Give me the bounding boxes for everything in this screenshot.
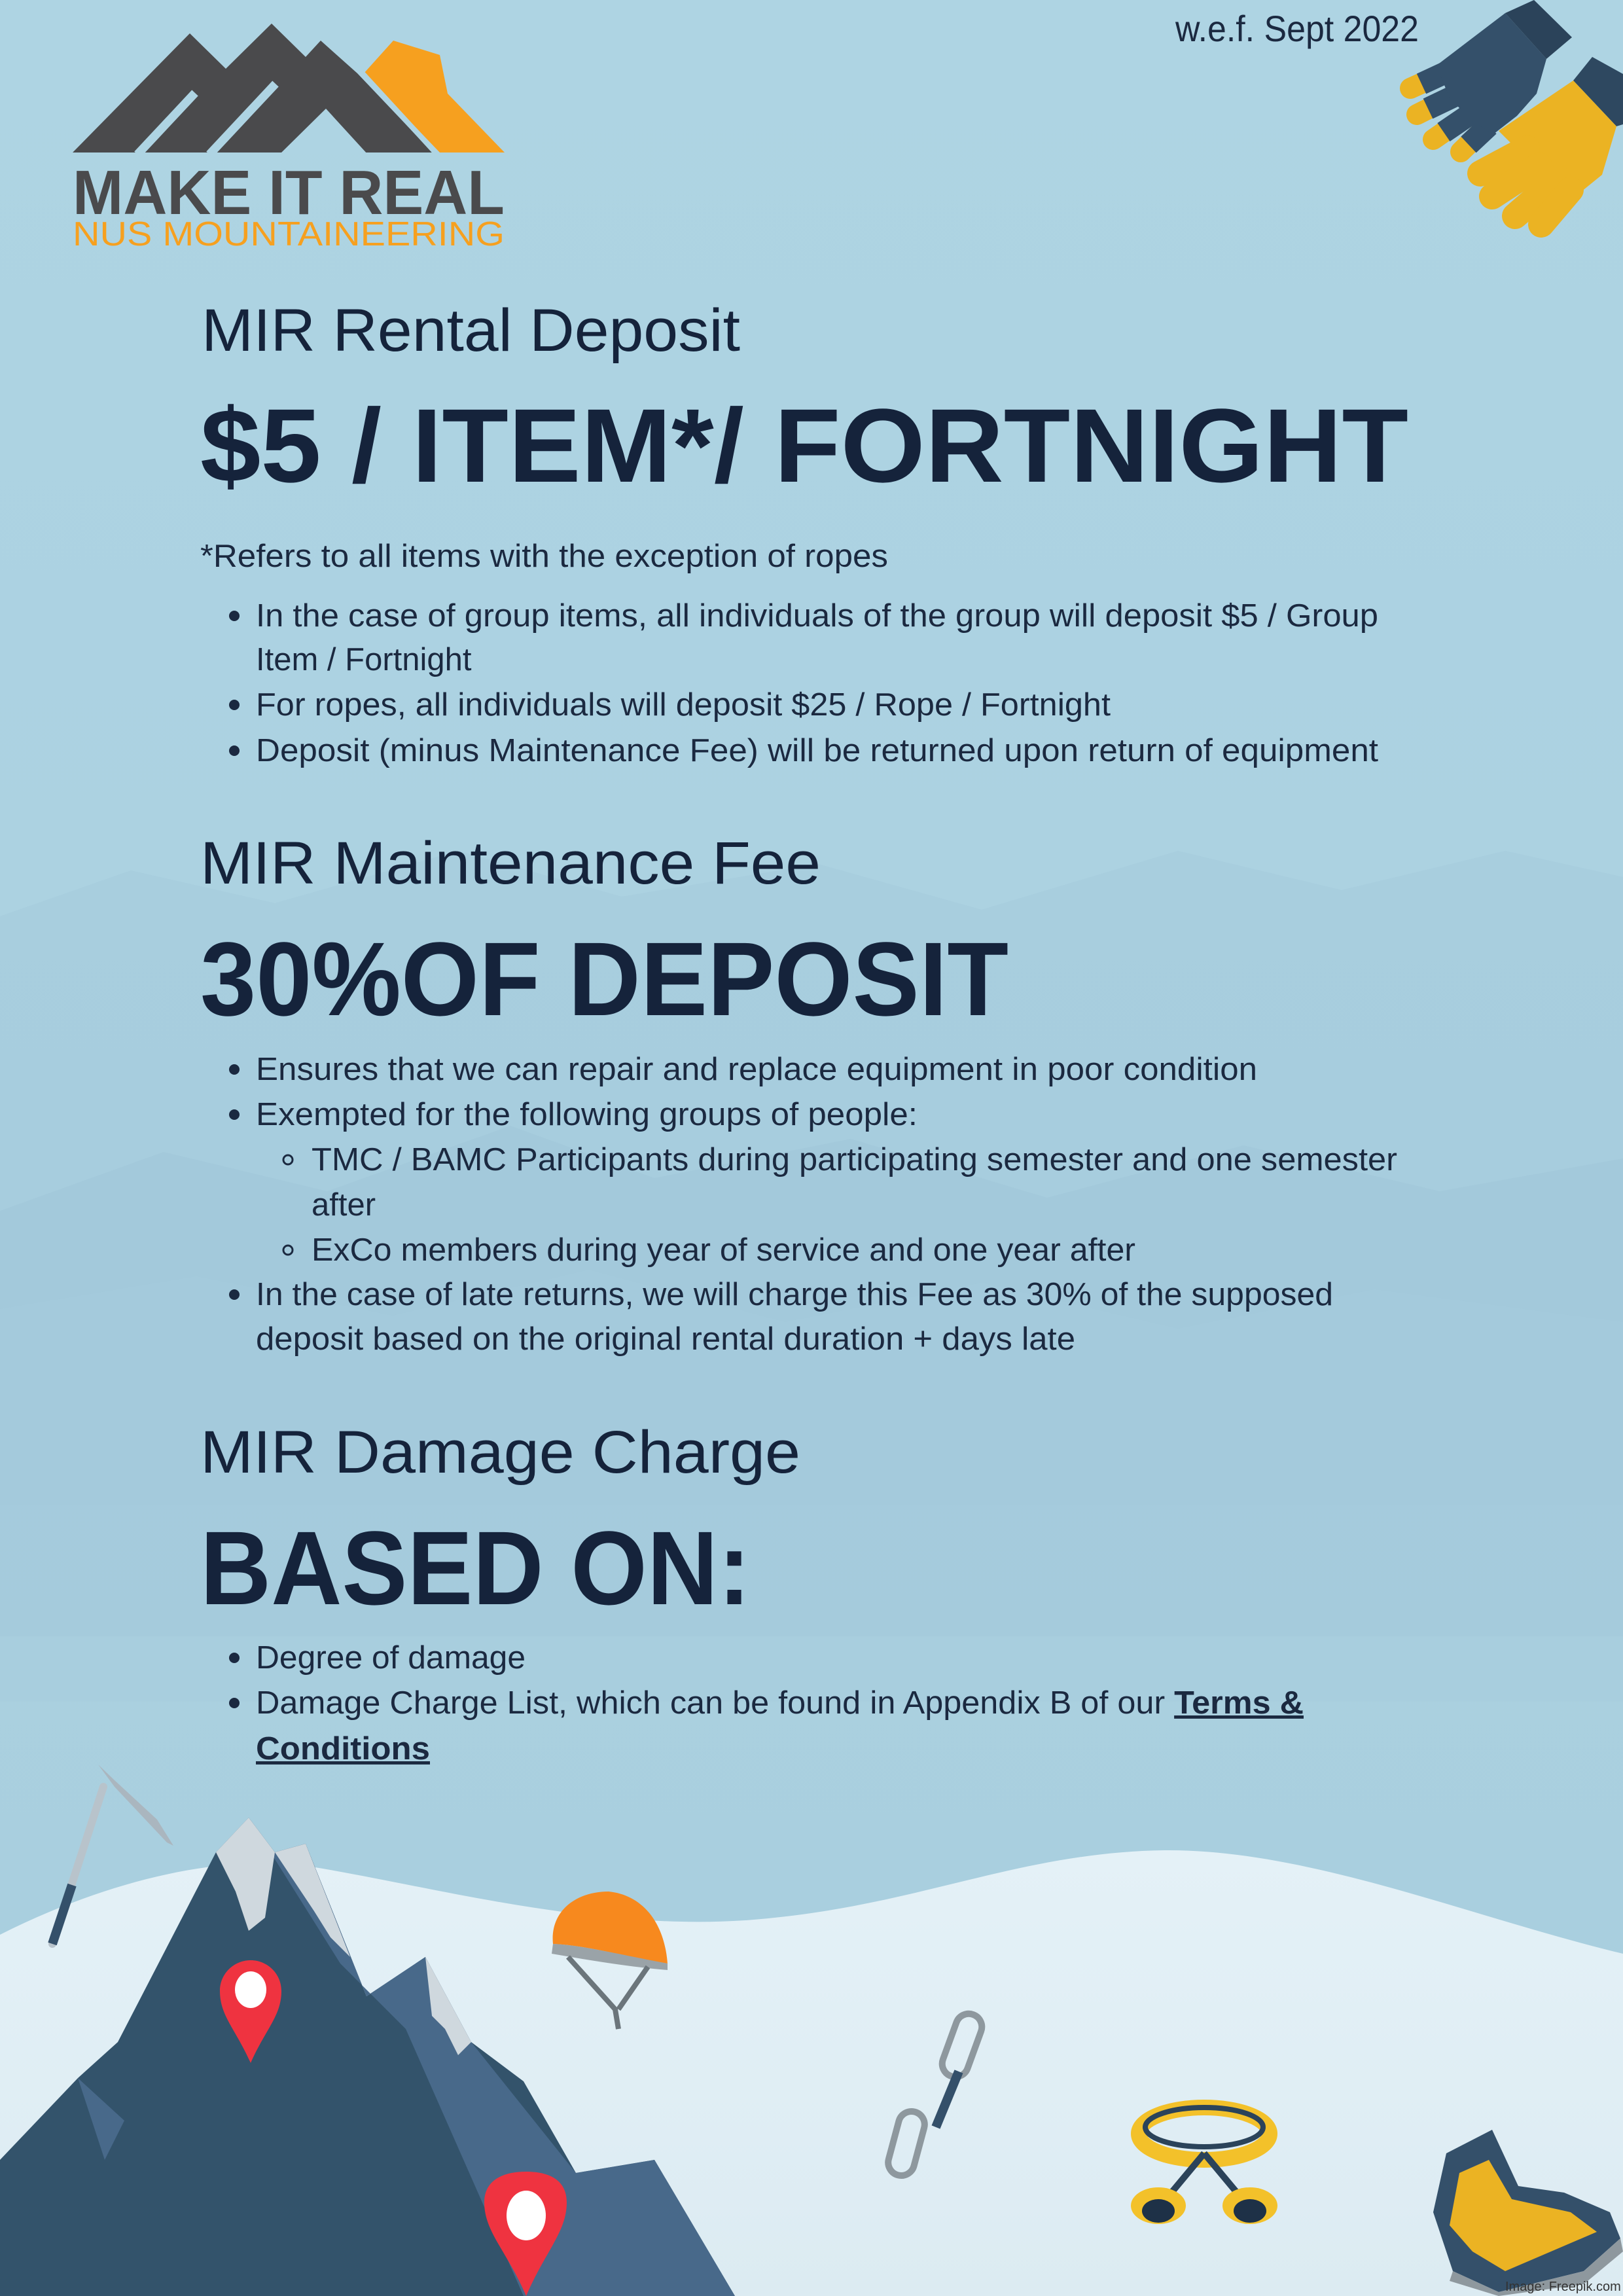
logo text: MAKE IT REAL [73, 158, 505, 228]
bullet list: maintenance: ExCo members during year of service and one year after [312, 1232, 1135, 1268]
icon: pin 1 [220, 1960, 281, 2063]
bullet list: damage: Degree of damage [256, 1640, 526, 1676]
bullet list: maintenance [229, 1052, 1397, 1357]
icon: harness [1131, 2108, 1277, 2224]
big price: $5 / ITEM*/ FORTNIGHT [200, 387, 1408, 504]
bullet list: deposit: For ropes, all individuals will deposit $25 / Rope / Fortnight [256, 687, 1111, 723]
icon: boot [1433, 2130, 1623, 2296]
icon: ice axe [52, 1765, 173, 1944]
yellow glove [1573, 57, 1623, 126]
icon: gloves [1410, 0, 1623, 224]
section: maintenance fee [200, 830, 1397, 1357]
heading: damage charge: MIR Damage Charge [200, 1419, 800, 1486]
bullet list: maintenance: TMC / BAMC Participants during participating semester and one semester [312, 1142, 1397, 1177]
section: damage charge [200, 1419, 1304, 1767]
bullet list: maintenance: In the case of late returns, we will charge this Fee as 30% of the supposed [256, 1277, 1333, 1312]
icon: mountain with pins [0, 1818, 735, 2296]
image credit: Image: Freepik.com [1505, 2280, 1621, 2294]
icon: quickdraw [885, 2010, 986, 2178]
big percentage: 30%OF DEPOSIT [200, 920, 1008, 1037]
logo: NUS MOUNTAINEERING [73, 215, 505, 253]
bullet list: deposit [229, 598, 1378, 768]
bullet list: damage: Damage Charge List, which can be found in Appendix B of our Terms & [256, 1685, 1304, 1721]
blue glove [1410, 72, 1486, 152]
bullet list: damage [229, 1640, 1304, 1767]
section: rental deposit [200, 297, 1408, 768]
bullet list: deposit: In the case of group items, all individuals of the group will deposit $5 / Group [256, 598, 1378, 634]
snow hills [0, 1850, 1623, 2296]
logo mountains [73, 24, 505, 154]
big based on: BASED ON: [200, 1509, 751, 1626]
icon: pin 2 [484, 2172, 567, 2296]
bullet list: damage: Conditions [256, 1731, 430, 1767]
icon: helmet [552, 1892, 668, 2029]
footnote: *Refers to all items with the exception of ropes [200, 539, 888, 574]
heading: rental deposit: MIR Rental Deposit [202, 297, 740, 364]
bullet list: deposit: Item / Fortnight [256, 642, 472, 677]
date label: w.e.f. Sept 2022 [1175, 8, 1419, 49]
heading: maintenance fee: MIR Maintenance Fee [200, 830, 821, 897]
bullet list: maintenance: after [312, 1187, 376, 1223]
bullet list: maintenance: Exempted for the following groups of people: [256, 1097, 918, 1132]
bullet list: deposit: Deposit (minus Maintenance Fee) will be returned upon return of equipment [256, 733, 1378, 768]
bullet list: maintenance: deposit based on the original rental duration + days late [256, 1321, 1075, 1357]
bullet list: maintenance: Ensures that we can repair and replace equipment in poor condition [256, 1052, 1257, 1087]
logo [73, 24, 505, 253]
